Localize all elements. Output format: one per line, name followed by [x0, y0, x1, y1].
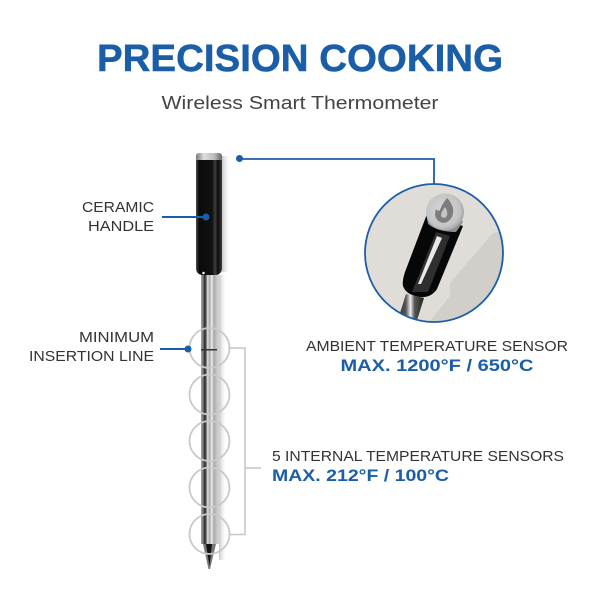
label: minimum insertion line: MINIMUM — [79, 330, 154, 346]
leader: minimum insertion line — [160, 346, 192, 352]
internal sensors text: MAX. 212°F / 100°C — [272, 466, 449, 485]
leader: ceramic handle — [162, 214, 210, 220]
label: minimum insertion line — [29, 330, 154, 365]
internal sensors text: 5 INTERNAL TEMPERATURE SENSORS — [272, 448, 564, 465]
label: ceramic handle: HANDLE — [88, 219, 154, 235]
ambient sensor text: MAX. 1200°F / 650°C — [340, 356, 534, 375]
bracket for internal sensors — [230, 348, 261, 534]
thermometer probe — [196, 153, 231, 569]
sensor rings — [190, 328, 230, 554]
ambient sensor text — [306, 338, 568, 375]
label: ceramic handle: CERAMIC — [82, 200, 154, 216]
label: minimum insertion line: INSERTION LINE — [29, 349, 154, 365]
title: PRECISION COOKING — [97, 38, 503, 80]
leader: ambient sensor — [236, 155, 434, 184]
ambient sensor text: AMBIENT TEMPERATURE SENSOR — [306, 338, 568, 355]
label: ceramic handle — [82, 200, 154, 235]
internal sensors text — [272, 448, 564, 485]
subtitle: Wireless Smart Thermometer — [162, 93, 438, 113]
zoomed ambient sensor circle — [365, 184, 510, 330]
